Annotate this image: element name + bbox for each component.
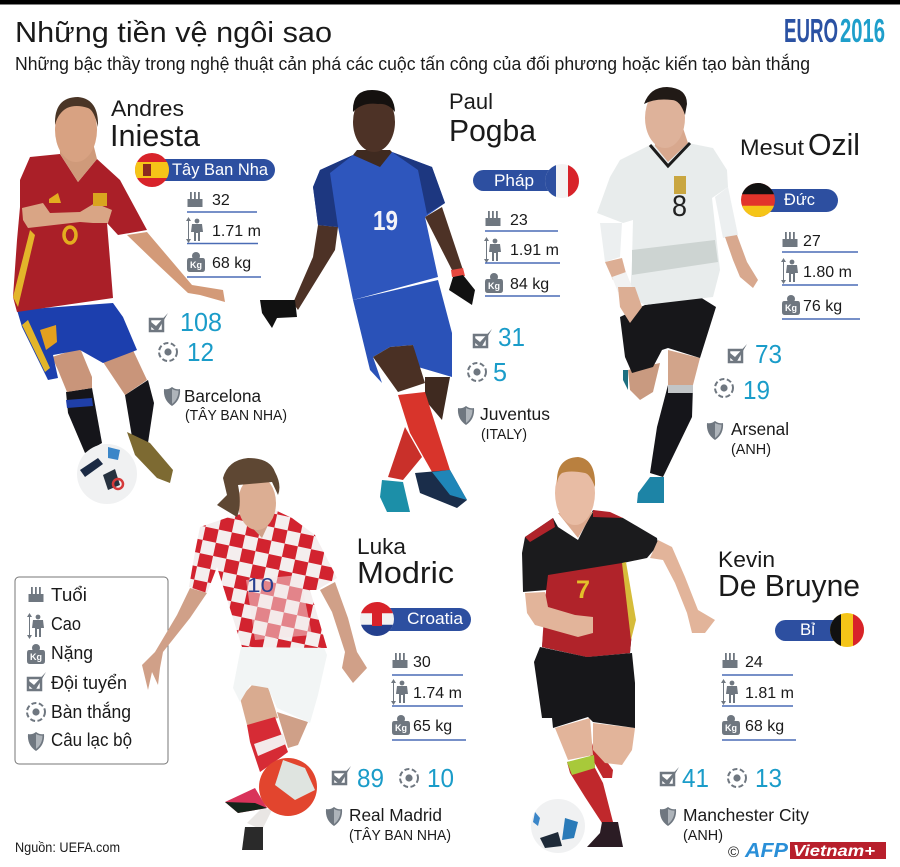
- player photo: Ozil: [597, 87, 758, 503]
- club: Pogba: [458, 404, 550, 443]
- club: Ozil: [707, 419, 789, 458]
- legend: Cao: [51, 614, 81, 634]
- caps and goals: Pogba: [468, 322, 525, 387]
- flag pill: France: [473, 164, 579, 198]
- club: Modric: [326, 805, 451, 844]
- legend: Đội tuyển: [51, 673, 127, 693]
- text: De Bruyne name: De Bruyne: [718, 569, 860, 603]
- stats: Ozil: 76 kg: [803, 298, 842, 315]
- caps and goals: Iniesta: [149, 307, 222, 367]
- text: Iniesta name: Iniesta: [110, 119, 200, 153]
- stats: De Bruyne: 1.81 m: [745, 685, 794, 702]
- caps and goals: Pogba: 31: [498, 322, 525, 352]
- legend: [15, 577, 168, 764]
- caps and goals: Modric: 10: [427, 763, 454, 793]
- text: De Bruyne name: Kevin: [718, 547, 775, 572]
- caps and goals: De Bruyne: 41: [682, 763, 709, 793]
- flag pill: Germany: Đức: [784, 190, 815, 209]
- flag pill: Belgium: Bỉ: [800, 620, 815, 639]
- player photo: Modric: 10: [247, 575, 274, 597]
- text: Modric name: Modric: [357, 556, 454, 590]
- text: Iniesta name: Andres: [111, 96, 184, 121]
- club: Ozil: (ANH): [731, 441, 771, 458]
- player photo: Modric: [142, 458, 367, 850]
- stats: Pogba: [484, 211, 560, 296]
- club: Iniesta: Barcelona: [184, 386, 261, 406]
- text: Pogba name: [449, 89, 536, 148]
- logo: AFP Vietnam credit: Vietnam+: [793, 843, 875, 860]
- stats: Iniesta: 68 kg: [212, 255, 251, 272]
- text: Modric name: Luka: [357, 534, 407, 559]
- club: Modric: Real Madrid: [349, 805, 442, 825]
- logo: AFP Vietnam credit: ©: [728, 844, 739, 861]
- club: Pogba: (ITALY): [481, 426, 527, 443]
- stats: Pogba: 1.91 m: [510, 242, 559, 259]
- text: Ozil name: Ozil: [808, 128, 860, 162]
- flag pill: Germany: [741, 183, 838, 217]
- player photo: Ozil: 8: [672, 190, 687, 223]
- legend: Nặng: [51, 643, 93, 663]
- club: Modric: (TÂY BAN NHA): [349, 827, 451, 844]
- title: Những tiền vệ ngôi sao: [15, 17, 332, 49]
- club: De Bruyne: Manchester City: [683, 805, 809, 825]
- caps and goals: Ozil: [715, 339, 782, 405]
- text: Pogba name: Paul: [449, 89, 493, 114]
- stats: Modric: [391, 653, 466, 740]
- text: Ozil name: [740, 128, 860, 162]
- text: Pogba name: Pogba: [449, 114, 536, 148]
- club: Pogba: Juventus: [480, 404, 550, 424]
- legend: Bàn thắng: [51, 701, 131, 722]
- player photo: De Bruyne: 7: [576, 576, 590, 604]
- caps and goals: Iniesta: 12: [187, 337, 214, 367]
- flag pill: Croatia: Croatia: [407, 609, 464, 628]
- caps and goals: Pogba: 5: [493, 357, 507, 387]
- legend: Câu lạc bộ: [51, 730, 132, 750]
- player photo: Pogba: 19: [373, 205, 398, 236]
- stats: Iniesta: [186, 192, 261, 277]
- legend: Tuổi: [51, 585, 87, 605]
- stats: De Bruyne: [721, 653, 796, 740]
- stats: Ozil: 27: [803, 233, 821, 250]
- logo: AFP Vietnam credit: AFP: [744, 840, 789, 862]
- player photo: Iniesta: [13, 97, 225, 504]
- stats: Iniesta: 32: [212, 192, 230, 209]
- club: Ozil: Arsenal: [731, 419, 789, 439]
- flag pill: Spain: Tây Ban Nha: [172, 160, 269, 179]
- caps and goals: Iniesta: 108: [180, 307, 222, 337]
- club: Iniesta: [164, 386, 287, 424]
- caps and goals: Modric: [332, 763, 454, 793]
- stats: Modric: 30: [413, 654, 431, 671]
- text: Iniesta name: [110, 96, 200, 153]
- stats: Pogba: 84 kg: [510, 276, 549, 293]
- stats: Modric: 65 kg: [413, 718, 452, 735]
- flag pill: Belgium: [775, 613, 864, 647]
- club: De Bruyne: (ANH): [683, 827, 723, 844]
- caps and goals: Ozil: 19: [743, 375, 770, 405]
- subtitle: Những bậc thầy trong nghệ thuật cản phá các cuộc tấn công của đối phương hoặc kiến tạo bàn thắng: [15, 53, 810, 74]
- flag pill: Croatia: [360, 602, 471, 636]
- caps and goals: De Bruyne: [660, 763, 782, 793]
- text: De Bruyne name: [718, 547, 860, 603]
- logo: AFP Vietnam credit: [728, 840, 886, 862]
- flag pill: France: Pháp: [494, 171, 534, 190]
- stats: De Bruyne: 68 kg: [745, 718, 784, 735]
- logo: Euro 2016: EURO: [784, 12, 838, 49]
- source: Nguồn: UEFA.com: [15, 839, 120, 855]
- caps and goals: Ozil: 73: [755, 339, 782, 369]
- stats: Iniesta: 1.71 m: [212, 223, 261, 240]
- club: De Bruyne: [660, 805, 809, 844]
- player photo: De Bruyne: [522, 457, 715, 853]
- club: Iniesta: (TÂY BAN NHA): [185, 407, 287, 424]
- stats: Ozil: 1.80 m: [803, 264, 852, 281]
- caps and goals: Modric: 89: [357, 763, 384, 793]
- stats: De Bruyne: 24: [745, 654, 763, 671]
- stats: Pogba: 23: [510, 212, 528, 229]
- stats: Ozil: [781, 232, 860, 319]
- player photo: Pogba: [260, 90, 475, 512]
- text: Ozil name: Mesut: [740, 135, 804, 160]
- flag pill: Spain: [135, 153, 275, 187]
- stats: Modric: 1.74 m: [413, 685, 462, 702]
- caps and goals: De Bruyne: 13: [755, 763, 782, 793]
- text: Modric name: [357, 534, 454, 590]
